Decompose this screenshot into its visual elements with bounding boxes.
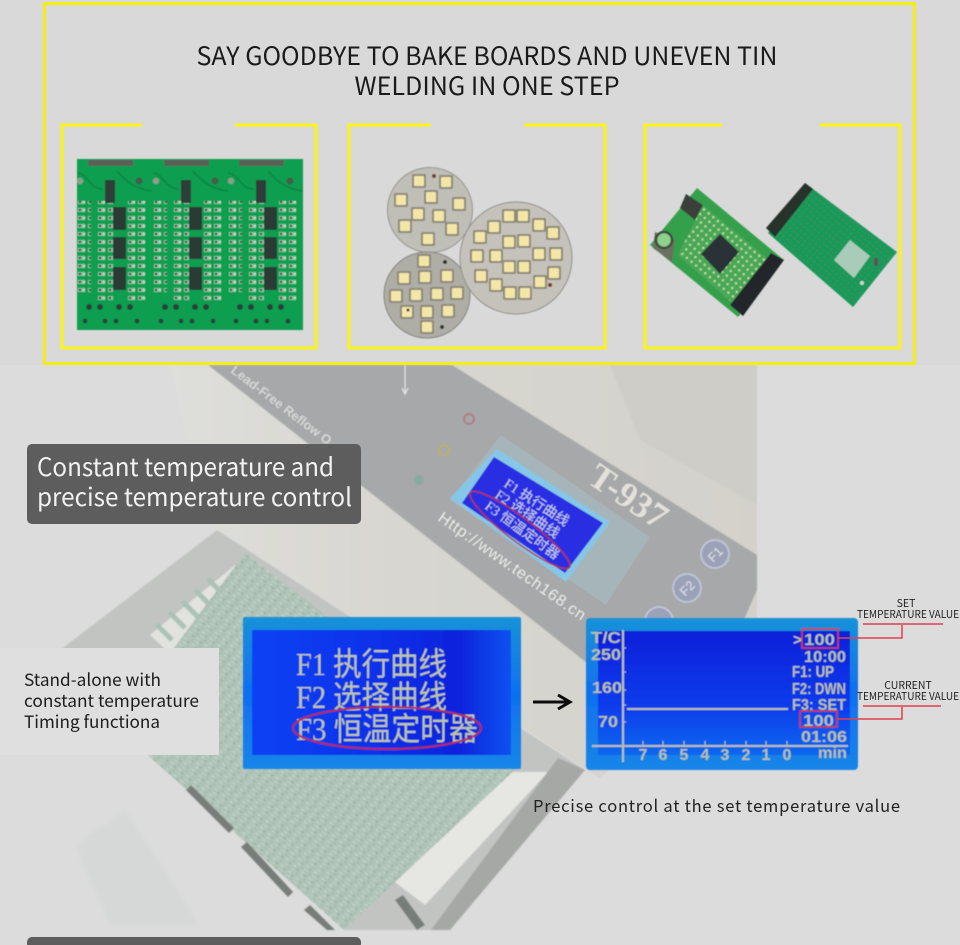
background photo: reflow oven	[60, 365, 757, 930]
website text: Http://www.tech168.cn	[435, 509, 589, 624]
callout: current temperature value: CURRENT	[884, 678, 932, 693]
photo: two green boards	[650, 183, 897, 317]
side readout: 100	[804, 632, 835, 649]
caption: Precise control at the set temperature value	[533, 793, 900, 817]
x axis labels	[639, 747, 792, 764]
small LCD text: F2 选择曲线	[492, 487, 562, 542]
callout: stand-alone timing: Timing functiona	[24, 708, 160, 733]
white strip by the rail	[392, 772, 548, 905]
menu text: F3 恒温定时器	[296, 711, 478, 747]
x axis labels: 2	[742, 747, 751, 764]
LCD temperature chart screen	[586, 618, 858, 770]
status light yellow	[439, 445, 449, 455]
callout: stand-alone timing: constant temperature	[24, 687, 199, 712]
control panel details	[228, 362, 729, 635]
photo: three round LED boards	[384, 168, 572, 338]
callout: constant temperature heading	[27, 444, 361, 524]
x axis labels: 5	[680, 747, 689, 764]
button F1: F1	[705, 544, 726, 565]
small LCD screen	[462, 457, 603, 573]
callout: current temperature value	[837, 678, 959, 719]
fin fingers	[156, 579, 224, 640]
small LCD text: F3 恒温定时器	[482, 498, 562, 563]
next section heading bar	[27, 937, 361, 945]
menu text: F1 执行曲线	[296, 646, 447, 682]
heading: WELDING IN ONE STEP	[354, 67, 620, 103]
x axis labels: 1	[762, 747, 771, 764]
red value boxes	[800, 629, 838, 727]
chart axes	[592, 630, 848, 762]
heading	[196, 37, 778, 103]
top section background	[0, 0, 960, 365]
small LCD text	[482, 476, 572, 563]
side readout: F1: UP	[792, 664, 834, 681]
callout: set temperature value	[838, 596, 959, 638]
panel: top yellow frame	[44, 4, 914, 364]
button F1	[701, 540, 729, 568]
menu text: F2 选择曲线	[296, 679, 447, 715]
LCD menu screen	[243, 617, 521, 769]
button F3	[645, 607, 673, 635]
red ellipse highlight	[293, 707, 481, 749]
oven name text: Lead-Free Reflow O	[228, 362, 335, 448]
callout: stand-alone timing: Stand-alone with	[24, 666, 161, 691]
small LCD red ellipse	[463, 483, 577, 577]
side readout	[792, 632, 847, 762]
circuit board in tray	[135, 553, 520, 930]
oven body	[170, 365, 757, 778]
frame 2	[349, 125, 605, 348]
side readout: >	[793, 632, 802, 649]
tray	[60, 530, 585, 930]
callout: stand-alone timing	[0, 648, 219, 755]
x axis labels: 3	[721, 747, 730, 764]
button F2: F2	[677, 578, 698, 599]
lower left blurred oven detail	[75, 810, 200, 925]
oven upper right shade	[610, 365, 757, 505]
y axis labels	[591, 630, 622, 731]
frame 3	[645, 125, 900, 348]
y axis labels: 250	[591, 647, 621, 664]
x axis labels: 4	[701, 747, 710, 764]
status light red	[464, 414, 474, 424]
model name T-937: T-937	[581, 455, 676, 537]
white fins	[150, 565, 268, 668]
panel: LED aluminium boards	[349, 125, 605, 348]
x axis labels: 7	[639, 747, 648, 764]
frame 1	[62, 125, 316, 348]
x axis labels: 0	[783, 747, 792, 764]
callout: constant temperature heading: precise temperature control	[37, 478, 352, 514]
callout: set temperature value: SET	[897, 596, 915, 611]
y axis labels: 70	[598, 714, 618, 731]
y axis labels: T/C	[591, 630, 622, 647]
callout: constant temperature heading: Constant temperature and	[37, 448, 334, 484]
heading: SAY GOODBYE TO BAKE BOARDS AND UNEVEN TIN	[196, 37, 778, 73]
side readout: F2: DWN	[792, 681, 846, 698]
y axis labels: 160	[592, 680, 622, 697]
side readout: 01:06	[801, 729, 847, 746]
small LCD text: F1 执行曲线	[501, 476, 572, 530]
x axis labels: 6	[659, 747, 668, 764]
photo: three-up green PCB	[77, 159, 303, 330]
side readout: min	[818, 745, 847, 762]
panel: green development boards	[645, 125, 900, 348]
dark control strip	[208, 365, 757, 663]
arrow	[533, 695, 570, 709]
small LCD frame	[450, 449, 610, 582]
panel: green circuit boards	[62, 125, 316, 348]
side readout: 100	[803, 713, 834, 730]
small LCD housing	[450, 435, 650, 605]
small pointer on panel	[402, 365, 408, 394]
button F2	[673, 574, 701, 602]
status light green	[414, 475, 424, 485]
board edge connectors	[186, 785, 425, 930]
axis ticks	[623, 648, 787, 746]
side readout: 10:00	[804, 649, 846, 666]
lower right tray rail	[431, 758, 585, 930]
side readout: F3: SET	[792, 697, 846, 714]
menu text	[296, 646, 478, 747]
